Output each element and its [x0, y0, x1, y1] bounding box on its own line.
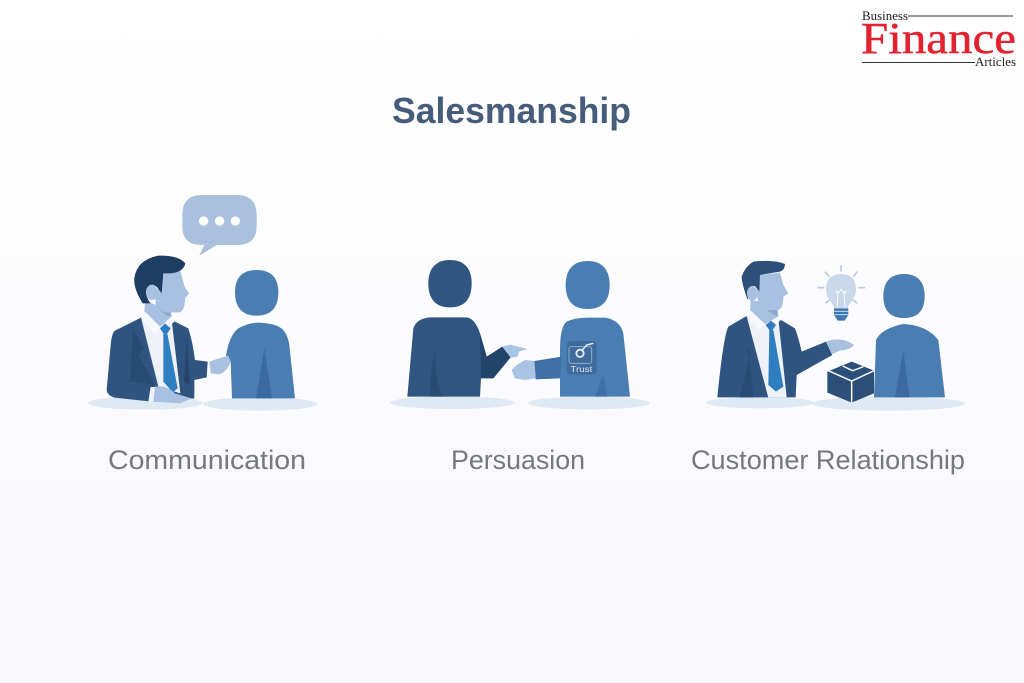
illustration: Communication — [88, 195, 317, 411]
right figure with trust badge — [512, 261, 630, 397]
trust badge: Trust — [570, 364, 593, 374]
logo: Business Finance Articles: Articles — [975, 55, 1016, 69]
left figure — [407, 260, 528, 397]
label: Customer Relationship: Customer Relationship — [691, 445, 965, 475]
floor shadows — [88, 396, 317, 411]
lightbulb icon — [817, 266, 865, 321]
illustration: Customer Relationship — [706, 261, 965, 411]
illustration: Persuasion — [390, 260, 650, 409]
box icon — [827, 362, 874, 403]
floor shadows — [706, 397, 965, 411]
label: Persuasion: Persuasion — [451, 445, 585, 475]
salesman figure — [717, 261, 854, 397]
salesman figure — [107, 256, 231, 403]
speech bubble icon — [182, 195, 257, 256]
logo: Business Finance Articles: Finance — [861, 14, 1016, 63]
logo: Business Finance Articles: Business — [862, 9, 908, 23]
floor shadows — [390, 396, 650, 409]
listener figure — [874, 274, 945, 397]
label: Communication: Communication — [108, 445, 306, 475]
listener figure — [226, 270, 295, 398]
title: Salesmanship — [392, 90, 631, 131]
